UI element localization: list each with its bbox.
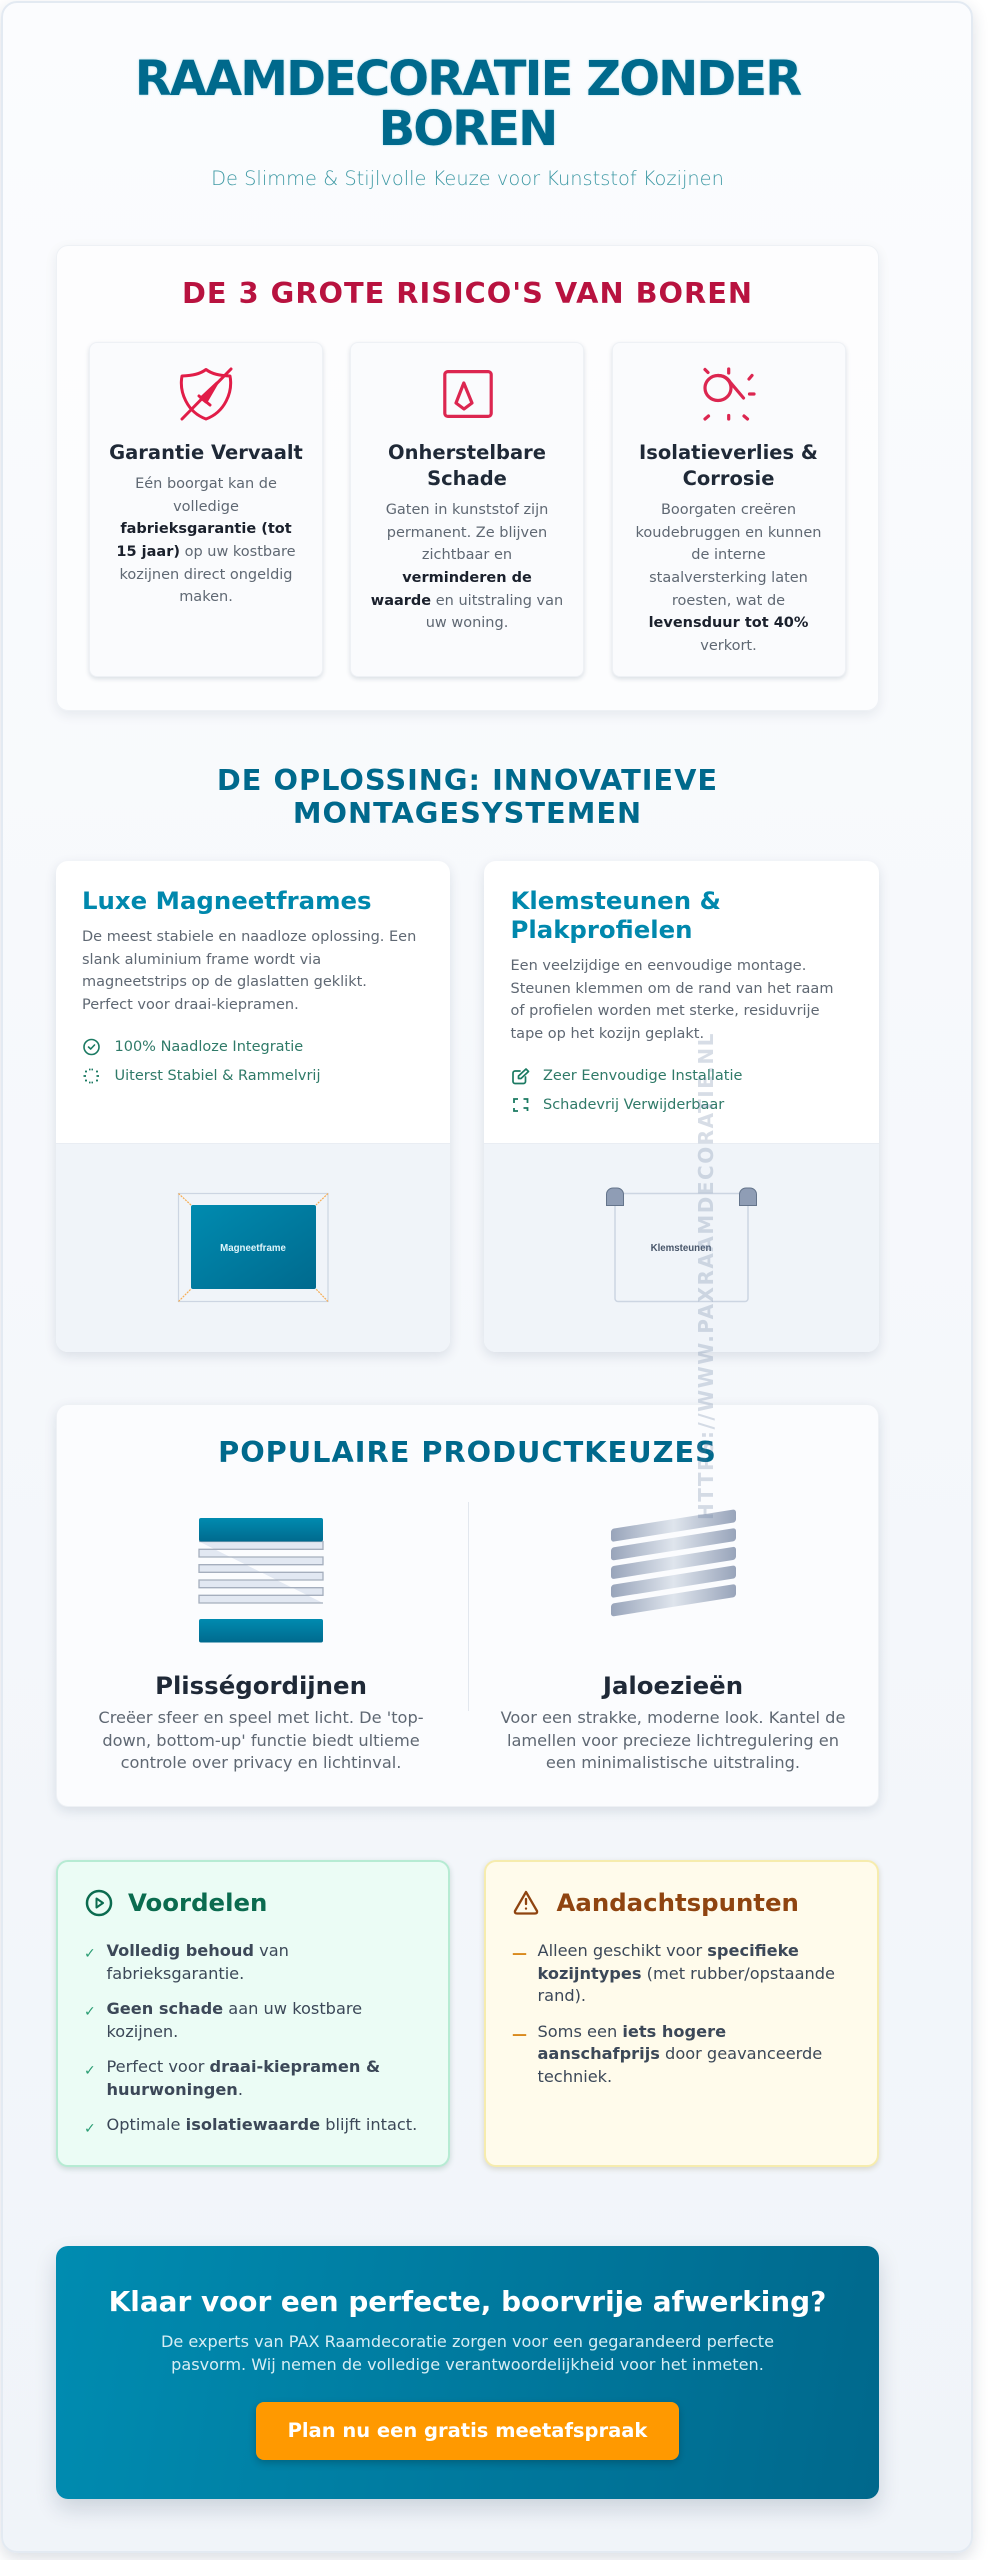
card text: 15 jaar) op uw kostbare <box>116 544 296 560</box>
clamps title: Plakprofielen <box>510 915 693 944</box>
card title: Isolatieverlies & <box>639 441 818 464</box>
plisse text <box>98 1708 424 1772</box>
clamps text: Steunen klemmen om de rand van het raam <box>510 981 833 997</box>
attention list: rand). <box>538 1986 586 2005</box>
card text: Boorgaten creëren <box>661 502 796 518</box>
card title: Onherstelbare <box>388 441 546 464</box>
card text: staalversterking laten <box>649 570 808 586</box>
illustration: magnet frame: Magneetframe <box>220 1243 286 1254</box>
cta heading: Klaar voor een perfecte, boorvrije afwerking? <box>109 2285 826 2318</box>
jaloezie title: Jaloezieën <box>603 1671 743 1700</box>
card title: Garantie Vervaalt <box>109 441 303 464</box>
card text <box>116 476 296 605</box>
icon: rust and cold bridge <box>703 367 756 421</box>
attention list: aanschafprijs door geavanceerde <box>538 2044 822 2063</box>
illustration: magnet frame <box>178 1193 328 1302</box>
feature: removable: Schadevrij Verwijderbaar <box>543 1097 724 1113</box>
cta button <box>256 2402 679 2460</box>
attention heading: Aandachtspunten <box>556 1888 799 1917</box>
check marks: ✓ <box>84 1946 96 1962</box>
magnet illustration background <box>56 1143 450 1352</box>
title: BOREN <box>379 101 556 157</box>
illustration: venetian blind <box>611 1510 736 1616</box>
magnet title: Luxe Magneetframes <box>82 886 372 915</box>
clamps illustration background <box>484 1143 879 1352</box>
card text: verminderen de <box>402 570 532 586</box>
clamps title: Klemsteunen & <box>510 886 721 915</box>
magnet text: slank aluminium frame wordt via <box>82 952 321 968</box>
divider <box>468 1502 469 1711</box>
panel: risks <box>56 245 879 711</box>
illustration: clamp frame: Klemsteunen <box>651 1243 711 1254</box>
advantages list <box>106 1941 417 2134</box>
card text: uw woning. <box>426 615 508 631</box>
card text: volledige <box>173 499 239 515</box>
cta text: pasvorm. Wij nemen de volledige verantwoordelijkheid voor het inmeten. <box>171 2355 764 2374</box>
card text: Eén boorgat kan de <box>135 476 277 492</box>
check marks: ✓ <box>84 2121 96 2137</box>
icon: play circle <box>86 1890 112 1916</box>
card text: levensduur tot 40% <box>649 615 808 631</box>
icon: edit <box>512 1068 530 1084</box>
plisse text: Creëer sfeer en speel met licht. De 'top- <box>98 1708 424 1727</box>
title: RAAMDECORATIE ZONDER <box>135 51 800 107</box>
card text: Gaten in kunststof zijn <box>386 502 548 518</box>
check marks: ✓ <box>84 2063 96 2079</box>
advantages list: huurwoningen. <box>106 2080 243 2099</box>
card title <box>639 441 818 490</box>
attention list: Soms een iets hogere <box>538 2022 726 2041</box>
advantages heading: Voordelen <box>128 1888 267 1917</box>
heading: solution: DE OPLOSSING: INNOVATIEVE <box>217 763 718 797</box>
icon: square with drop <box>443 370 493 418</box>
card text: de interne <box>691 547 766 563</box>
heading: solution: MONTAGESYSTEMEN <box>293 796 642 830</box>
panel: attention points <box>484 1860 879 2167</box>
clamps text <box>510 958 833 1042</box>
card text: kozijnen direct ongeldig <box>119 567 293 583</box>
icon: warning triangle <box>514 1890 538 1915</box>
card text: zichtbaar en <box>422 547 512 563</box>
advantages list: fabrieksgarantie. <box>106 1964 244 1983</box>
plisse text: controle over privacy en lichtinval. <box>121 1753 401 1772</box>
advantages list: kozijnen. <box>106 2022 178 2041</box>
plisse title: Plisségordijnen <box>155 1671 367 1700</box>
feature: stable: Uiterst Stabiel & Rammelvrij <box>114 1068 320 1084</box>
jaloezie text <box>500 1708 845 1772</box>
attention list <box>538 1941 835 2086</box>
attention list: kozijntypes (met rubber/opstaande <box>538 1964 835 1983</box>
clamps text: tape op het kozijn geplakt. <box>510 1026 704 1042</box>
heading: products: POPULAIRE PRODUCTKEUZES <box>218 1435 717 1469</box>
risk card: insulation <box>612 342 846 677</box>
title <box>135 51 802 157</box>
advantages list: Perfect voor draai-kiepramen & <box>106 2057 380 2076</box>
magnet text: De meest stabiele en naadloze oplossing. Een <box>82 929 416 945</box>
panel: magnet frames <box>56 861 450 1352</box>
jaloezie text: Voor een strakke, moderne look. Kantel de <box>501 1708 845 1727</box>
card text: fabrieksgarantie (tot <box>120 521 292 537</box>
clamps title <box>510 886 721 944</box>
panel: products <box>56 1404 879 1807</box>
jaloezie text: een minimalistische uitstraling. <box>546 1753 800 1772</box>
heading: risks: DE 3 GROTE RISICO'S VAN BOREN <box>182 276 753 310</box>
panel: advantages <box>56 1860 450 2167</box>
clamps text: of profielen worden met sterke, residuvrije <box>510 1003 820 1019</box>
card text <box>371 502 563 631</box>
card text: maken. <box>179 589 233 605</box>
feature: seamless: 100% Naadloze Integratie <box>114 1039 303 1055</box>
icon: dashed stability <box>84 1068 99 1084</box>
icon: check circle <box>83 1038 100 1056</box>
advantages list: Optimale isolatiewaarde blijft intact. <box>106 2115 417 2134</box>
panel: call to action <box>56 2246 879 2499</box>
card text: permanent. Ze blijven <box>387 525 547 541</box>
risk card: damage <box>350 342 584 677</box>
illustration: pleated blind <box>198 1518 324 1642</box>
advantages list: Volledig behoud van <box>106 1941 289 1960</box>
dash markers <box>512 1944 527 2043</box>
subtitle: De Slimme & Stijlvolle Keuze voor Kunststof Kozijnen <box>211 167 724 190</box>
dash markers: — <box>512 1944 527 1962</box>
icon: shield with drill <box>180 367 233 421</box>
card text: koudebruggen en kunnen <box>636 525 821 541</box>
jaloezie text: lamellen voor precieze lichtregulering en <box>507 1731 839 1750</box>
risk card: warranty <box>89 342 323 677</box>
feature: installation: Zeer Eenvoudige Installatie <box>543 1068 742 1084</box>
card title: Schade <box>427 467 507 490</box>
heading: solution <box>217 763 718 830</box>
dash markers: — <box>512 2025 527 2043</box>
attention list: techniek. <box>538 2067 612 2086</box>
plisse text: down, bottom-up' functie biedt ultieme <box>102 1731 420 1750</box>
card text: verkort. <box>700 638 757 654</box>
cta text <box>161 2332 774 2374</box>
card title <box>388 441 546 490</box>
clamps text: Een veelzijdige en eenvoudige montage. <box>510 958 806 974</box>
attention list: Alleen geschikt voor specifieke <box>538 1941 799 1960</box>
magnet text: magneetstrips op de glaslatten geklikt. <box>82 974 367 990</box>
cta text: De experts van PAX Raamdecoratie zorgen voor een gegarandeerd perfecte <box>161 2332 774 2351</box>
illustration: clamp frame <box>606 1188 757 1302</box>
card title: Corrosie <box>683 467 774 490</box>
text: HTTPS://WWW.PAXRAAMDECORATIE.NL <box>694 1032 718 1520</box>
magnet text: Perfect voor draai-kiepramen. <box>82 997 299 1013</box>
card text <box>636 502 821 654</box>
panel: clamps <box>484 861 879 1352</box>
icon: corners <box>513 1098 528 1112</box>
check marks: ✓ <box>84 2004 96 2020</box>
card text: waarde en uitstraling van <box>371 593 563 609</box>
check marks <box>84 1946 96 2137</box>
magnet text <box>82 929 416 1013</box>
card text: roesten, wat de <box>672 593 785 609</box>
cta button: Plan nu een gratis meetafspraak <box>288 2419 647 2442</box>
advantages list: Geen schade aan uw kostbare <box>106 1999 362 2018</box>
